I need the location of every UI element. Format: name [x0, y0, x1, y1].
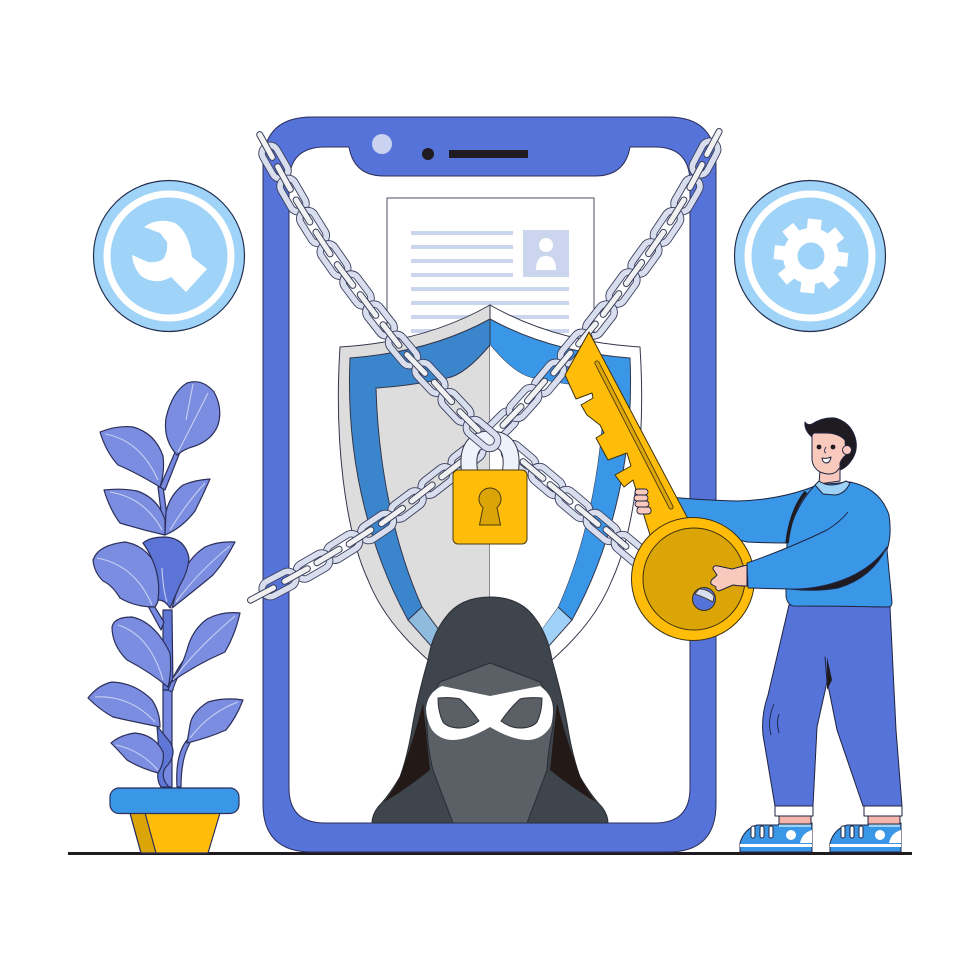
socks: [779, 816, 811, 824]
neck: [819, 462, 840, 484]
hooded hacker: [372, 597, 608, 823]
shoes: [740, 821, 901, 852]
person: back hand: [634, 489, 651, 514]
shield band light segments: [408, 607, 439, 647]
hood inner shadows: [384, 703, 430, 802]
camera: [372, 134, 392, 154]
bag strap lower: [790, 547, 887, 590]
chain: upper right: [499, 127, 723, 430]
icon: gear badge: [734, 180, 886, 332]
profile photo: [523, 230, 569, 277]
hair: [805, 418, 856, 470]
shield inner divide: [490, 345, 604, 700]
sensor: [422, 148, 434, 160]
collar: [815, 481, 850, 495]
plant leaves: [88, 382, 243, 773]
icon: wrench badge: [94, 180, 244, 332]
padlock: [453, 439, 527, 544]
ear: [842, 446, 852, 454]
knee creases: [770, 704, 779, 735]
key slot: [597, 363, 671, 507]
hood: [372, 597, 608, 823]
chain: upper left: [256, 131, 501, 452]
key bow: [632, 518, 754, 640]
shield: [338, 305, 642, 720]
document: [387, 198, 594, 368]
nose: [824, 447, 826, 453]
shield band right: [490, 319, 631, 620]
plant: [88, 382, 243, 853]
front arm: [747, 512, 887, 589]
ground line: [68, 852, 912, 855]
front hand: [711, 565, 747, 591]
key: [565, 332, 754, 640]
pants: [763, 605, 902, 806]
plant stems: [148, 450, 190, 787]
speaker: [449, 150, 528, 158]
chain: lower right: [483, 408, 649, 567]
key hole with chain: [692, 588, 716, 610]
mask eyes: [438, 698, 479, 728]
torso: [786, 482, 892, 607]
phone frame: [263, 117, 716, 852]
face: [812, 425, 850, 474]
plant pot: [110, 788, 239, 853]
shackle: [469, 439, 511, 474]
person: back arm: [670, 486, 815, 543]
eyes: [817, 445, 821, 449]
white mask: [426, 686, 553, 740]
face covering: [427, 663, 553, 823]
chain: lower left: [246, 440, 486, 604]
plant leaf veins: [95, 384, 238, 770]
lock body: [453, 470, 527, 544]
mouth: [822, 457, 831, 463]
person: [711, 418, 902, 852]
cuffs: [775, 806, 813, 816]
bag strap: [787, 492, 806, 543]
shield band left: [349, 319, 490, 620]
keyhole: [479, 488, 501, 525]
